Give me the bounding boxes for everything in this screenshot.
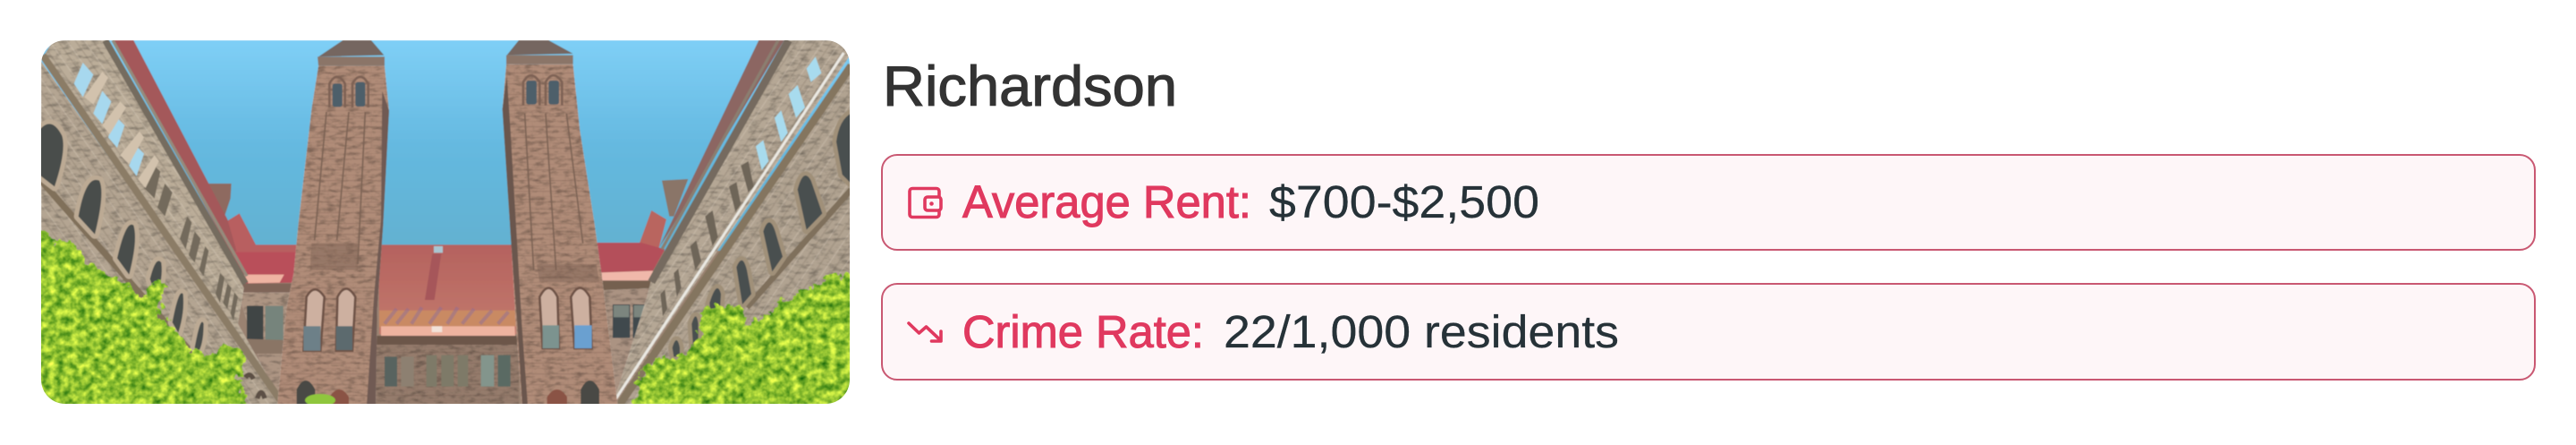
sky	[41, 40, 850, 251]
belt courses	[619, 65, 852, 406]
upper windows	[756, 56, 821, 170]
value: crime rate figure: 22/1,000 residents	[1224, 306, 1619, 357]
arched tower windows	[539, 288, 559, 348]
belt courses	[43, 56, 284, 406]
label: Average Rent: Average Rent:	[962, 176, 1251, 227]
roof strip	[114, 40, 236, 255]
left tower	[277, 40, 389, 405]
label: Crime Rate: Crime Rate:	[962, 306, 1204, 357]
roof strip	[659, 40, 784, 247]
central roof and rear wall	[369, 244, 519, 405]
icon: wallet	[910, 188, 941, 217]
arched windows	[673, 114, 852, 356]
arched windows	[35, 124, 204, 351]
heading: Richardson: Richardson	[883, 56, 1177, 118]
value: rent range: $700-$2,500	[1269, 176, 1539, 227]
cornice	[651, 40, 789, 282]
left wing	[35, 40, 303, 406]
chimney and small roofs	[208, 183, 233, 215]
panel: average rent	[882, 155, 2535, 250]
upper wall	[45, 40, 265, 372]
card background	[882, 155, 2535, 250]
pilasters	[84, 72, 159, 188]
courtyard shrub	[305, 394, 335, 406]
photo: Richardson courtyard with twin towers	[32, 40, 859, 410]
icon: trending down arrow	[909, 323, 941, 341]
upper wall	[613, 40, 852, 405]
panel: crime rate	[882, 284, 2535, 380]
ground wall base	[233, 250, 721, 404]
tree: right	[631, 273, 859, 410]
card background	[882, 284, 2535, 380]
cornice	[106, 40, 245, 284]
lower wall	[41, 61, 283, 405]
arched tower windows	[303, 289, 325, 351]
right wing	[597, 40, 852, 406]
tree: left	[32, 231, 250, 410]
upper windows	[74, 63, 144, 176]
distant arched windows	[245, 375, 265, 398]
chimney and small roofs	[662, 179, 688, 217]
right tower	[503, 40, 618, 405]
lower wall	[619, 61, 852, 405]
